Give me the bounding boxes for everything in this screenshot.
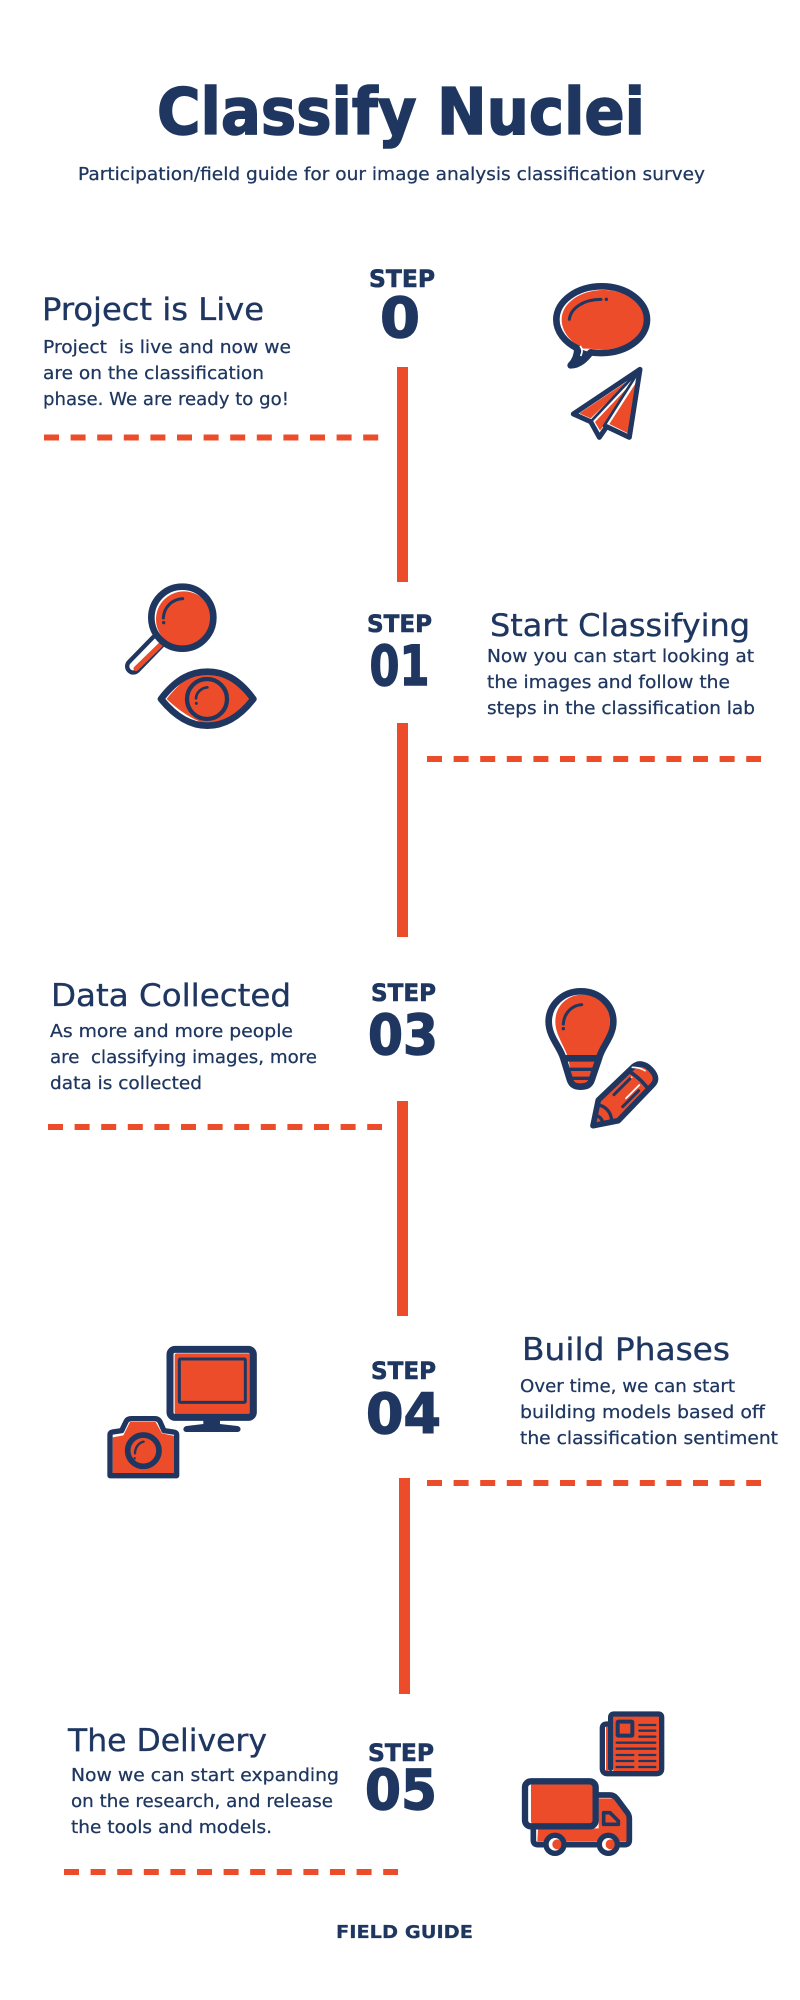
text block: project is live: Project is live and now we (43, 337, 291, 358)
step 03 label: STEP (371, 979, 436, 1007)
icon: monitor (170, 1349, 253, 1432)
panel: step 05 (64, 1714, 662, 1872)
text block: project is live: are on the classification (43, 363, 264, 384)
icon: delivery truck (525, 1781, 629, 1856)
text block: start classifying: steps in the classification lab (487, 698, 755, 719)
title: Classify Nuclei (157, 76, 645, 150)
step 03 label: 03 (368, 1003, 438, 1067)
text block: build phases: building models based off (520, 1402, 766, 1423)
text block: the delivery: the tools and models. (71, 1817, 272, 1838)
step 04 label: STEP (371, 1357, 436, 1385)
icon: camera (110, 1419, 177, 1476)
text block: project is live (43, 337, 291, 410)
text block: project is live: phase. We are ready to go! (43, 389, 289, 410)
icon: light bulb (549, 991, 613, 1087)
step 01 label: STEP (367, 610, 432, 638)
step 0 label (369, 265, 435, 350)
vertical timeline bar (397, 723, 408, 937)
text block: the delivery (71, 1765, 339, 1838)
text block: data collected: As more and more people (50, 1021, 293, 1042)
heading: project is live: Project is Live (42, 292, 264, 328)
vertical timeline bar (397, 367, 408, 582)
panel: step 03 (48, 978, 656, 1316)
text block: start classifying (487, 646, 755, 719)
text block: the delivery: on the research, and release (71, 1791, 333, 1812)
text block: start classifying: Now you can start looking at (487, 646, 754, 667)
step 05 label: 05 (365, 1758, 437, 1822)
text block: build phases: Over time, we can start (520, 1376, 735, 1397)
text block: build phases: the classification sentiment (520, 1428, 778, 1449)
panel: step 04 (110, 1332, 778, 1694)
dashed connector (427, 756, 761, 762)
heading: data collected: Data Collected (51, 978, 291, 1014)
text block: data collected: are classifying images, more (50, 1047, 317, 1068)
dashed connector (48, 1124, 382, 1130)
heading: build phases: Build Phases (522, 1332, 730, 1368)
text block: build phases (520, 1376, 778, 1449)
icon: eye (161, 672, 253, 726)
step 03 label (368, 979, 438, 1067)
icon: pencil (593, 1064, 656, 1126)
text block: the delivery: Now we can start expanding (71, 1765, 339, 1786)
step 04 label: 04 (366, 1382, 441, 1446)
icon: newspaper (602, 1714, 662, 1774)
text block: start classifying: the images and follow the (487, 672, 730, 693)
step 01 label (367, 610, 432, 698)
step 0 label: STEP (369, 265, 435, 293)
heading: start classifying: Start Classifying (490, 608, 750, 644)
panel: step 01 (133, 587, 761, 937)
subtitle: Participation/field guide for our image analysis classification survey (78, 164, 705, 185)
text block: data collected (50, 1021, 317, 1094)
icon: paper plane (573, 369, 640, 437)
dashed connector (427, 1480, 761, 1486)
dashed connector (64, 1869, 398, 1875)
step 0 label: 0 (380, 286, 420, 350)
step 05 label: STEP (368, 1739, 434, 1767)
step 01 label: 01 (370, 634, 430, 698)
icon: magnifying glass (133, 587, 213, 669)
dashed connector (44, 434, 380, 440)
icon: speech bubble (556, 286, 647, 365)
text block: data collected: data is collected (50, 1073, 202, 1094)
heading: the delivery: The Delivery (67, 1723, 267, 1759)
footer: field guide: FIELD GUIDE (336, 1922, 473, 1943)
vertical timeline bar (399, 1478, 410, 1694)
panel: step 0 (42, 265, 647, 582)
vertical timeline bar (397, 1101, 408, 1316)
